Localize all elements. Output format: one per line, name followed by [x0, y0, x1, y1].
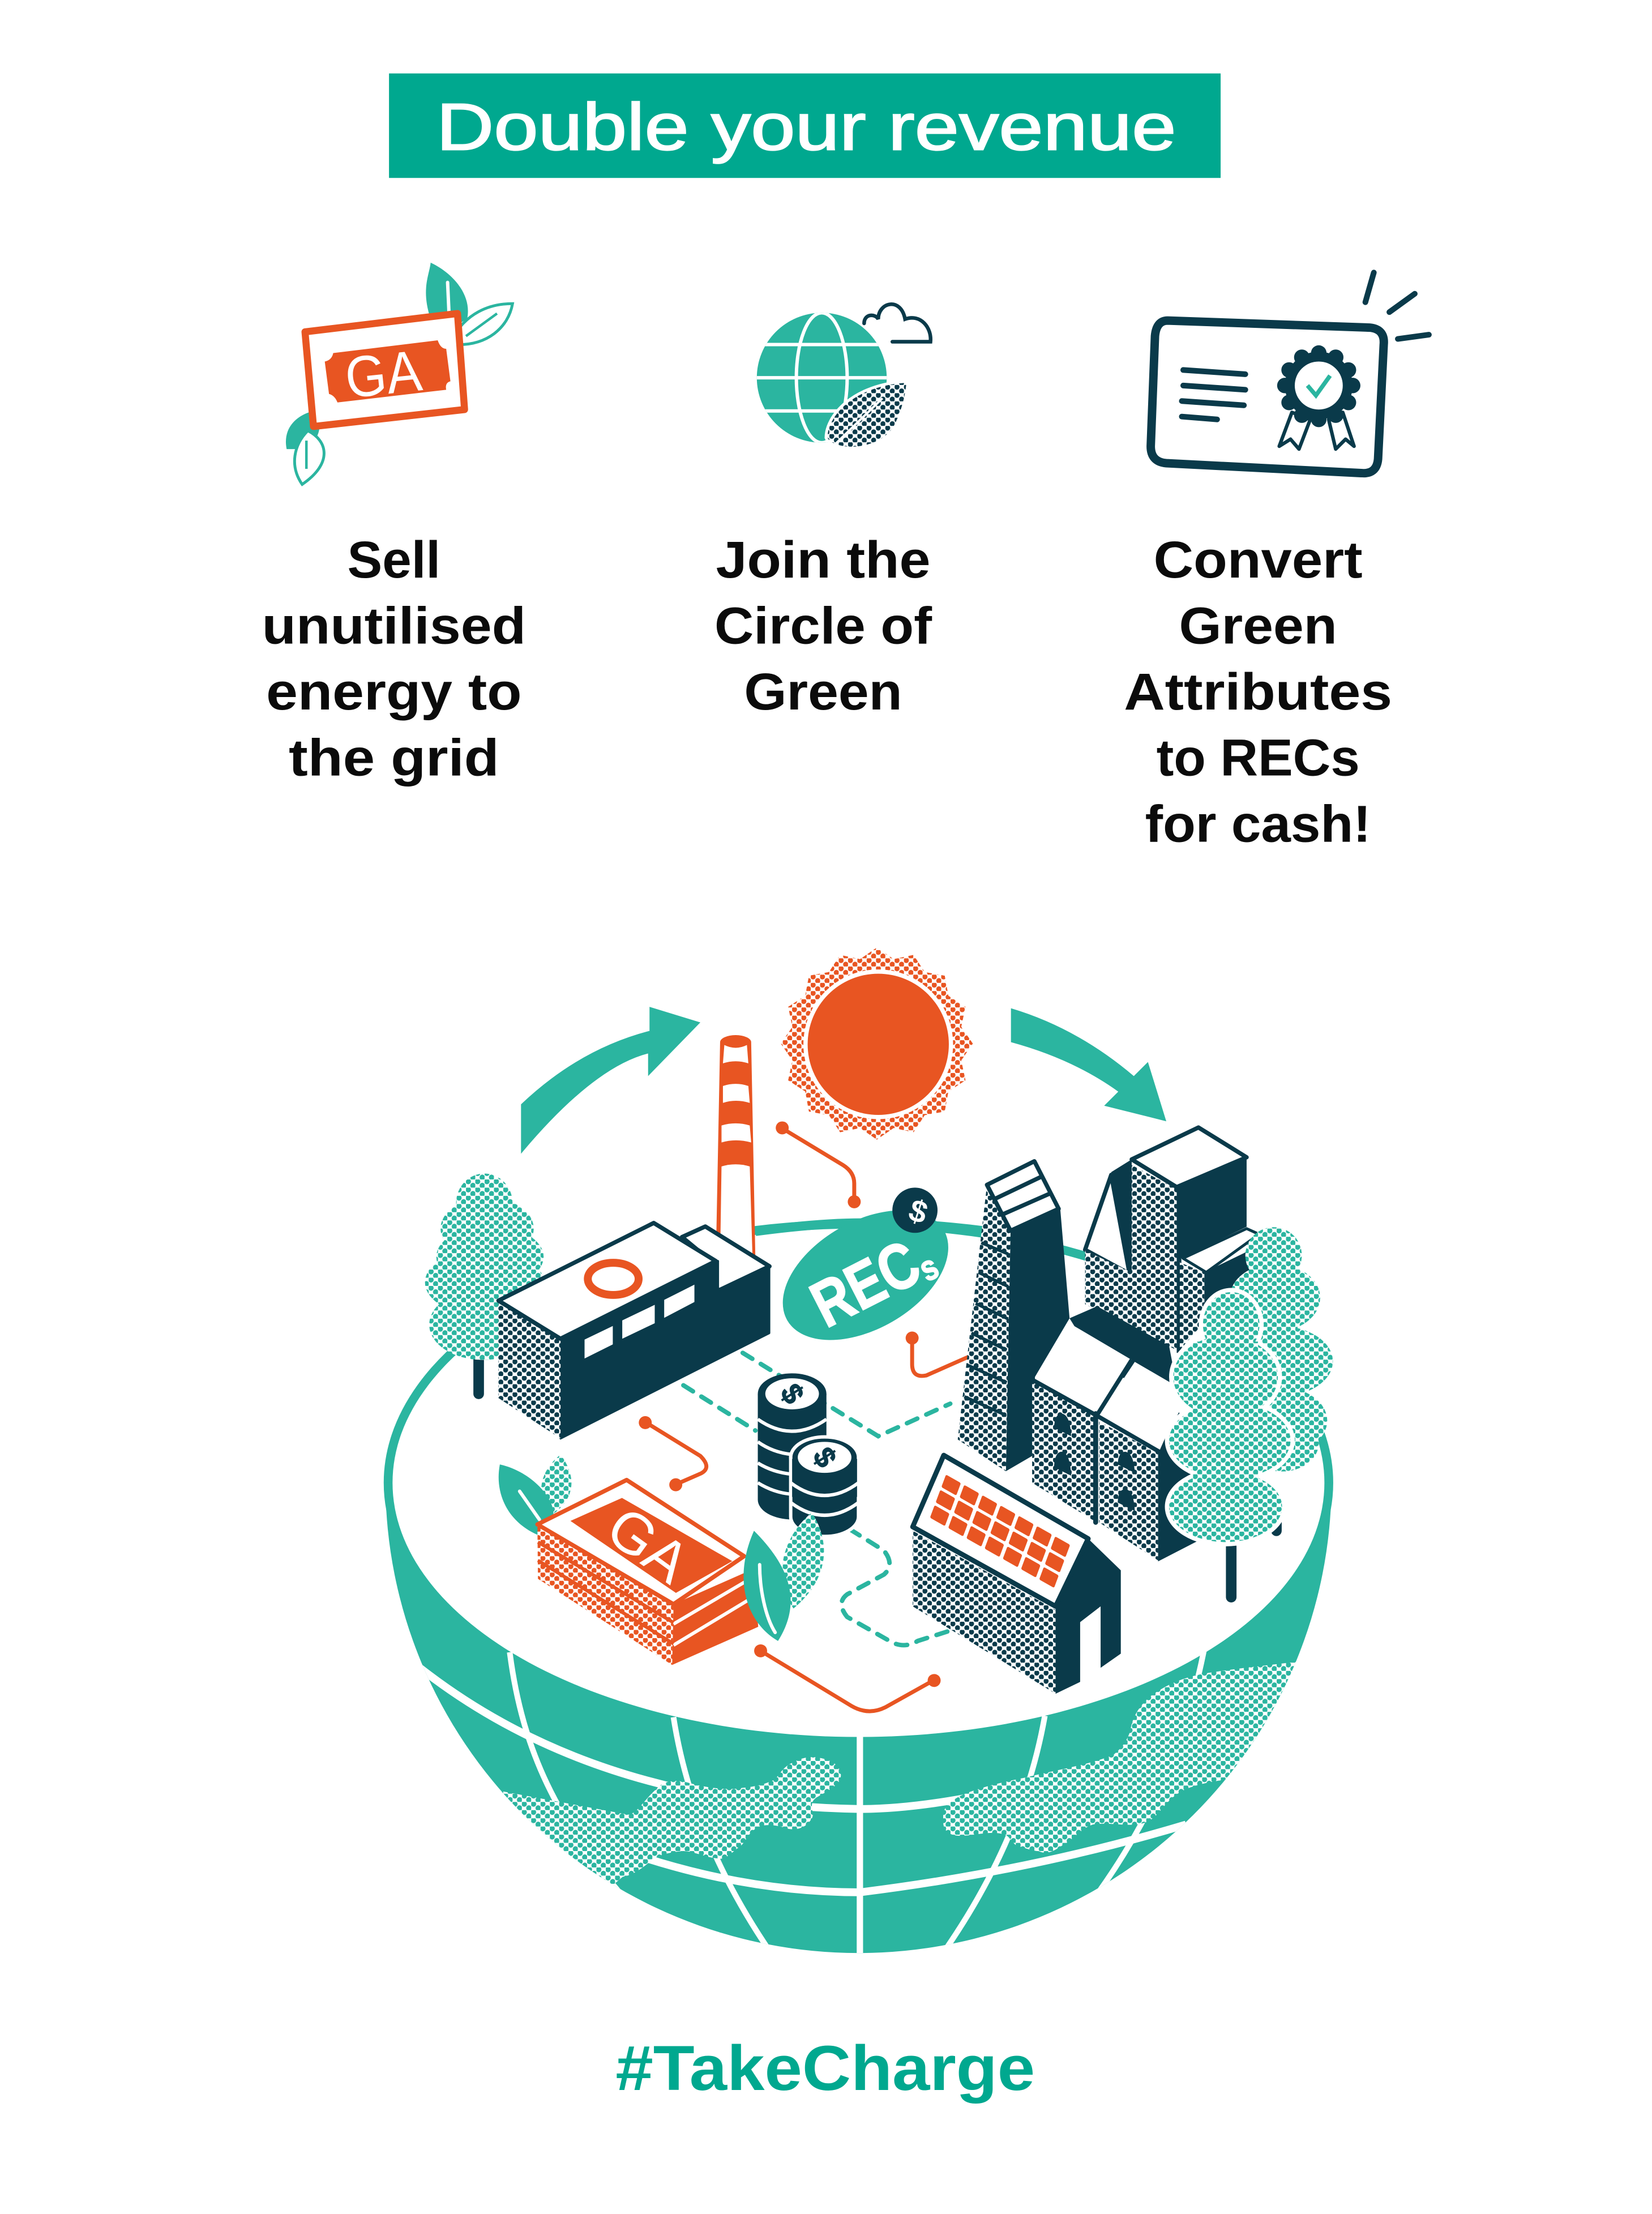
coin stack 2: $	[806, 1442, 842, 1473]
text: convert green attributes: for cash!	[1145, 794, 1371, 853]
orange connector: sun to RECs	[776, 1121, 861, 1208]
tree: right back	[1226, 1227, 1333, 1531]
orange connector: GA to barn	[754, 1644, 941, 1711]
windows	[1054, 1413, 1135, 1511]
icon: GA ticket with leaves: GA	[342, 337, 425, 411]
left continent	[502, 1757, 841, 1884]
text: join the circle of green: Green	[744, 662, 902, 721]
arrow: right cycle arrow	[1011, 1008, 1166, 1121]
icon: REC certificate with seal	[1151, 272, 1429, 473]
RECs badge: $	[905, 1192, 932, 1230]
text: sell unutilised energy: the grid	[289, 728, 499, 787]
RECs badge: REC	[799, 1215, 955, 1341]
text: convert green attributes	[1124, 530, 1392, 853]
tree: left	[425, 1173, 543, 1394]
tree: right front	[1169, 1292, 1291, 1597]
orange connector: factory to GA	[639, 1416, 707, 1491]
GA money stack	[537, 1480, 758, 1665]
text: convert green attributes: Attributes	[1124, 662, 1392, 721]
factory building	[498, 1223, 769, 1438]
text: sell unutilised energy: energy to	[266, 662, 522, 721]
platform top	[392, 1229, 1324, 1737]
text: convert green attributes: Green	[1179, 596, 1337, 655]
solar panels	[930, 1474, 1070, 1588]
GA money stack: GA	[596, 1494, 701, 1596]
RECs badge	[760, 1183, 970, 1367]
globe hemisphere	[386, 1224, 1341, 1963]
orange connector: RECs to tower	[906, 1332, 974, 1376]
hashtag: #TakeCharge	[615, 2032, 1035, 2104]
RECs badge: s	[913, 1247, 945, 1289]
coins	[758, 1373, 858, 1536]
tall tower	[958, 1161, 1069, 1471]
right continent	[943, 1662, 1296, 1853]
arrow: left cycle arrow	[521, 1007, 700, 1154]
solar barn	[913, 1455, 1121, 1694]
text: convert green attributes: Convert	[1154, 530, 1363, 589]
text: join the circle of green: Circle of	[714, 596, 932, 655]
coin stack 1	[758, 1373, 827, 1519]
text: sell unutilised energy: Sell	[348, 530, 440, 589]
coin stack 2	[791, 1437, 858, 1536]
text: sell unutilised energy: unutilised	[262, 596, 526, 655]
infographic canvas	[265, 74, 1432, 2104]
back building block	[1085, 1127, 1259, 1356]
title banner	[389, 74, 1221, 178]
left leaves	[499, 1455, 571, 1535]
text: convert green attributes: to RECs	[1157, 728, 1360, 787]
coin stack 1: $	[773, 1378, 810, 1409]
title banner: Double your revenue	[436, 89, 1176, 164]
front leaves	[743, 1512, 824, 1641]
text: join the circle of green: Join the	[716, 530, 931, 589]
icon: GA ticket with leaves	[286, 263, 512, 484]
double-roof house	[1032, 1306, 1229, 1562]
dashed connectors	[683, 1353, 950, 1645]
text: join the circle of green	[714, 530, 932, 721]
text: sell unutilised energy	[262, 530, 526, 787]
back rim arc	[755, 1223, 988, 1232]
icon: sun	[781, 947, 973, 1140]
chimney	[716, 1035, 755, 1260]
icon: globe with cloud and leaf	[748, 304, 931, 448]
